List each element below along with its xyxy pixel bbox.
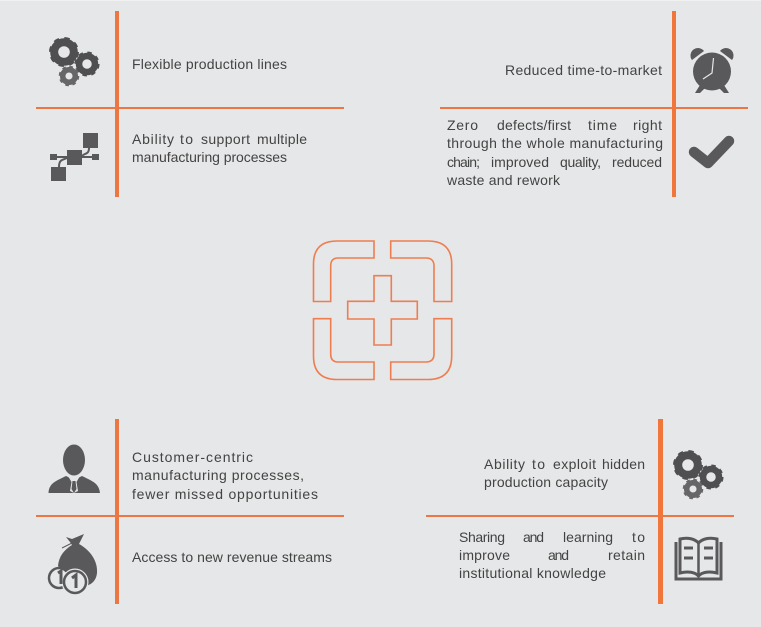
text: flexible production lines: Flexible production lines (132, 56, 287, 72)
text: ability to exploit hidden production capacity: hidden (602, 456, 645, 472)
text: ability to support multiple manufacturing processes: support (201, 131, 250, 147)
text: ability to support multiple manufacturing processes: multiple (257, 131, 307, 147)
text: zero defects: improved (491, 154, 549, 170)
text: access to new revenue streams: Access to new revenue streams (132, 549, 332, 565)
panel: bottom left (36, 419, 344, 604)
text: customer-centric: manufacturing processes, (132, 467, 304, 483)
text: ability to exploit hidden production capacity: production capacity (484, 474, 608, 490)
text: ability to support multiple manufacturing processes (132, 131, 307, 165)
panel: bottom right (426, 419, 734, 604)
panel: top right (440, 11, 748, 197)
panel: top left (36, 11, 344, 197)
text: ability to support multiple manufacturing processes: manufacturing processes (132, 149, 287, 165)
text: customer-centric (132, 449, 318, 502)
text: ability to exploit hidden production capacity: to (532, 456, 545, 472)
text: ability to exploit hidden production capacity: Ability (484, 456, 525, 472)
center logo: cross in brackets (314, 241, 452, 380)
text: zero defects: through the whole manufacturing (447, 135, 663, 151)
text: sharing and learning: institutional knowledge (459, 565, 606, 581)
text: zero defects: Zero (447, 117, 478, 133)
text: zero defects: waste and rework (446, 172, 561, 188)
text: ability to support multiple manufacturing processes: to (180, 131, 193, 147)
text: ability to exploit hidden production capacity (484, 456, 645, 490)
icon: gears (51, 39, 98, 85)
text: zero defects: time (588, 117, 617, 133)
text: customer-centric: fewer missed opportunities (132, 486, 318, 502)
text: ability to exploit hidden production capacity: exploit (553, 456, 596, 472)
text: sharing and learning: retain (608, 547, 645, 563)
icon: business person (48, 444, 100, 493)
text: zero defects: chain; (447, 154, 480, 170)
text: sharing and learning: Sharing (459, 529, 505, 545)
icon: process flow (50, 133, 99, 181)
text: zero defects: reduced (612, 154, 662, 170)
text: zero defects: right (633, 117, 662, 133)
text: sharing and learning: and (523, 529, 544, 545)
text: zero defects: quality, (560, 154, 601, 170)
icon: open book (676, 538, 721, 579)
text: sharing and learning: learning (563, 529, 613, 545)
text: sharing and learning (459, 529, 645, 581)
text: customer-centric: Customer-centric (132, 449, 253, 465)
text: sharing and learning: improve (459, 547, 510, 563)
icon: gears (675, 452, 722, 498)
text: reduced time-to-market: Reduced time-to-market (505, 62, 662, 78)
text: sharing and learning: to (632, 529, 645, 545)
icon: alarm clock (691, 48, 733, 93)
icon: money bag with coins (49, 534, 97, 596)
icon: check mark (694, 141, 729, 163)
text: sharing and learning: and (548, 547, 569, 563)
text: ability to support multiple manufacturing processes: Ability (132, 131, 174, 147)
text: zero defects: defects/first (497, 117, 571, 133)
text: zero defects (446, 117, 663, 188)
